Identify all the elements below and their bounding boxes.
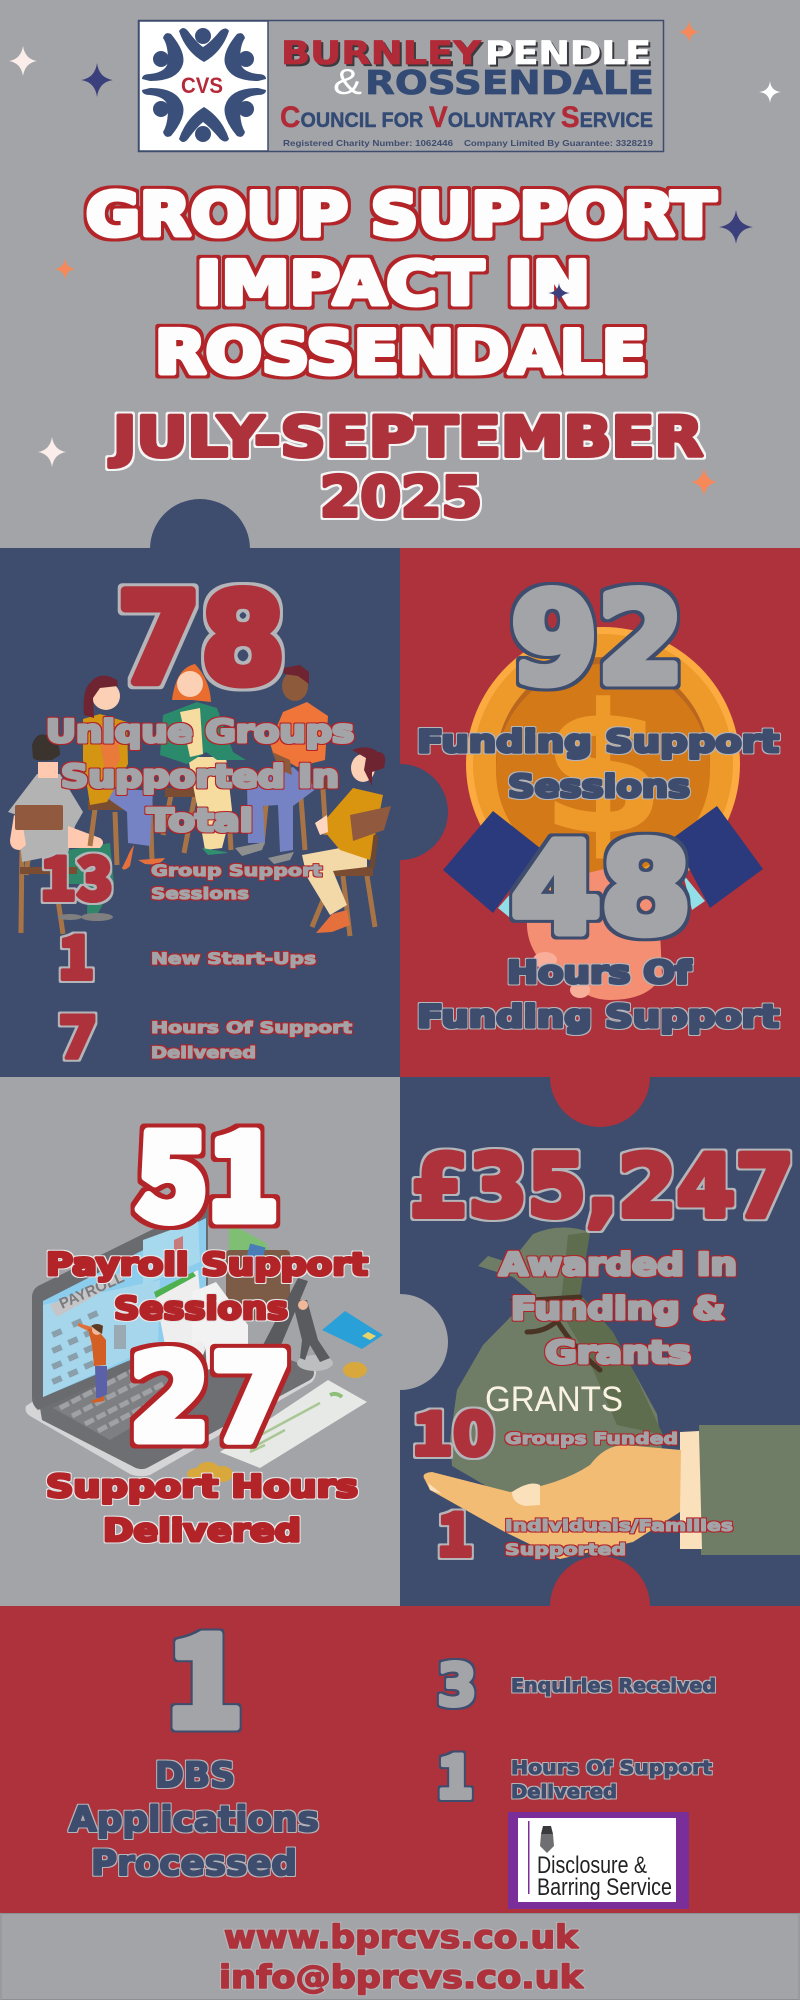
logo wordmark: ROSSENDALE — [365, 63, 654, 102]
panel: footer — [1, 1914, 799, 2000]
illustration: payroll laptop — [26, 1205, 383, 1482]
stat: 92 funding support sessions: Funding Support — [417, 724, 779, 760]
date: JULY-SEPTEMBER — [108, 405, 703, 469]
stat: 1 new start-ups — [58, 910, 316, 997]
puzzle tab: red into navy — [550, 1027, 650, 1127]
small star over title — [548, 283, 570, 303]
stat: 1 individuals and families: Supported — [505, 1540, 626, 1559]
footer contact text: www.bprcvs.co.uk — [224, 1918, 579, 1956]
logo wordmark: PENDLE — [487, 36, 653, 74]
stat: 10 groups funded: 10 — [412, 1386, 494, 1473]
logo icon: CVS emblem — [139, 21, 268, 151]
illustration: gold coin and handshake — [443, 627, 763, 1000]
stat: 48 hours of funding support: Hours Of — [507, 955, 692, 991]
person: woman with ponytail — [83, 676, 165, 870]
logo wordmark: PENDLE — [485, 34, 651, 72]
stat: 1 individuals and families: Individuals/Families — [505, 1516, 733, 1535]
stat: 51 payroll support sessions: Payroll Support — [46, 1247, 368, 1283]
logo wordmark: Registered Charity Number: 1062446 — [283, 138, 453, 148]
icon: receipt — [154, 1270, 248, 1390]
stat: 27 support hours delivered: Support Hours — [46, 1469, 358, 1505]
stat: 27 support hours delivered: 27 — [129, 1330, 292, 1469]
stat: 51 payroll support sessions: 51 — [136, 1080, 279, 1255]
person: woman with red hair — [160, 664, 246, 855]
stat: £35,247 awarded: £35,247 — [410, 1137, 794, 1237]
puzzle tab: grey into navy — [352, 1294, 448, 1390]
title — [86, 180, 716, 388]
stat: 92 funding support sessions: 92 — [511, 567, 684, 712]
logo: Burnley Pendle & Rossendale CVS — [138, 20, 664, 152]
stat: 1 hour of support: 1 — [437, 1729, 474, 1816]
logo icon: CVS emblem: CVS — [181, 73, 223, 98]
stat: 10 groups funded — [412, 1386, 678, 1473]
logo wordmark: BURNLEY — [283, 36, 484, 74]
screen calendar — [143, 1220, 200, 1285]
person: woman in yellow top — [302, 747, 391, 936]
stat: 10 groups funded: Groups Funded — [505, 1429, 678, 1448]
logo wordmark: BURNLEY — [281, 34, 482, 72]
panel: grants (navy) — [400, 1077, 800, 1606]
date: 2025 — [320, 465, 482, 529]
date — [108, 405, 703, 529]
title: GROUP SUPPORT — [86, 180, 716, 250]
panel: funding support (red) — [400, 548, 800, 1077]
decorative sparkle stars — [9, 20, 781, 496]
icon: cheque — [220, 1380, 367, 1468]
stat: 7 hours of support: Hours Of Support — [151, 1018, 352, 1037]
stat: 7 hours of support: Delivered — [151, 1043, 256, 1062]
person: man in orange hoodie — [235, 665, 328, 864]
panel: DBS (red) — [0, 1556, 800, 1913]
stat: 1 DBS applications — [69, 1579, 319, 1884]
laptop deck — [40, 1330, 314, 1469]
icon: handshake — [443, 806, 763, 1000]
stat: 1 individuals and families — [437, 1487, 733, 1574]
panel: payroll (grey) — [0, 1077, 400, 1606]
puzzle tab: navy into red — [352, 764, 448, 860]
icon: money bag — [450, 1227, 663, 1500]
person: man seen from behind — [8, 734, 114, 934]
stat: 1 hour of support — [437, 1729, 712, 1816]
icon: wallet and cash — [226, 1223, 290, 1320]
person: man pushing pen — [263, 1278, 333, 1371]
stat: 1 DBS applications: 1 — [166, 1579, 244, 1764]
stat: 78 unique groups: 78 — [117, 567, 285, 712]
stat: 27 support hours delivered — [46, 1330, 358, 1549]
stat: 51 payroll support sessions — [46, 1080, 368, 1327]
stat: 1 individuals and families: 1 — [437, 1487, 474, 1574]
stat: £35,247 awarded: Awarded In — [499, 1247, 737, 1283]
stat: 78 unique groups: Unique Groups — [46, 714, 354, 750]
stat: 13 group support sessions: 13 — [40, 831, 113, 918]
logo wordmark: Company Limited By Guarantee: 3328219 — [464, 138, 653, 148]
stat: 7 hours of support — [58, 1004, 352, 1072]
title: IMPACT IN — [196, 249, 590, 319]
stat: 1 DBS applications: DBS — [155, 1756, 235, 1796]
icon: money bag: GRANTS — [485, 1380, 623, 1419]
logo: Disclosure & Barring Service: Barring Service — [537, 1874, 672, 1901]
footer contact text — [219, 1918, 584, 1996]
footer contact text: info@bprcvs.co.uk — [219, 1958, 584, 1996]
stat: 48 hours of funding support: 48 — [511, 817, 691, 962]
stat: £35,247 awarded: Grants — [545, 1335, 691, 1371]
stat: 78 unique groups — [46, 567, 354, 839]
stat: 92 funding support sessions — [417, 567, 779, 805]
icon: gold coins — [187, 1362, 367, 1482]
stat: 48 hours of funding support: Funding Support — [417, 999, 779, 1035]
panel: group support (navy) — [0, 499, 400, 1077]
laptop base — [26, 1368, 316, 1476]
logo: Disclosure & Barring Service: Disclosure & — [537, 1852, 647, 1879]
stat: 13 group support sessions — [40, 831, 322, 918]
stat: 3 enquiries received: 3 — [437, 1651, 477, 1719]
stat: 1 DBS applications: Processed — [91, 1844, 297, 1884]
stat: 1 new start-ups: New Start-Ups — [151, 949, 316, 968]
stat: 13 group support sessions: Group Support — [151, 861, 322, 880]
stat: 92 funding support sessions: Sessions — [508, 769, 690, 805]
stat: 51 payroll support sessions: Sessions — [114, 1291, 288, 1327]
person: pointing man — [78, 1323, 107, 1403]
stat: 48 hours of funding support — [417, 817, 779, 1035]
logo wordmark: & — [333, 61, 362, 102]
stat: 27 support hours delivered: Delivered — [103, 1513, 301, 1549]
stat: 7 hours of support: 7 — [58, 1004, 98, 1072]
laptop screen — [32, 1205, 208, 1410]
logo wordmark — [280, 34, 654, 148]
keyboard — [53, 1365, 195, 1440]
screen calculator keys — [51, 1310, 126, 1385]
stat: 13 group support sessions: Sessions — [151, 884, 249, 903]
stat: 1 hour of support: Hours Of Support — [511, 1757, 712, 1779]
stat: 3 enquiries received: Enquiries Received — [511, 1675, 716, 1697]
stat: 3 enquiries received — [437, 1651, 716, 1719]
stat: 1 new start-ups: 1 — [58, 910, 95, 997]
icon: coin: $ — [540, 666, 666, 875]
title: ROSSENDALE — [155, 318, 647, 388]
logo: Disclosure & Barring Service — [508, 1812, 689, 1909]
screen heading — [50, 1273, 123, 1317]
stat: 1 hour of support: Delivered — [511, 1781, 617, 1803]
stat: £35,247 awarded — [410, 1137, 794, 1371]
stat: £35,247 awarded: Funding & — [511, 1291, 725, 1327]
stat: 78 unique groups: Supported In — [61, 759, 339, 795]
icon: crest — [540, 1826, 554, 1853]
illustration: people in a support circle — [8, 664, 391, 936]
icon: credit card — [322, 1311, 383, 1349]
logo wordmark: COUNCIL FOR VOLUNTARY SERVICE — [280, 101, 653, 134]
illustration: payroll laptop: PAYROLL — [57, 1269, 127, 1313]
stat: 1 DBS applications: Applications — [69, 1800, 319, 1840]
icon: hand and sleeve — [424, 1425, 800, 1559]
illustration: grants bag in open hand — [424, 1227, 800, 1559]
stat: 78 unique groups: Total — [147, 803, 253, 839]
icon: coin — [466, 627, 740, 901]
